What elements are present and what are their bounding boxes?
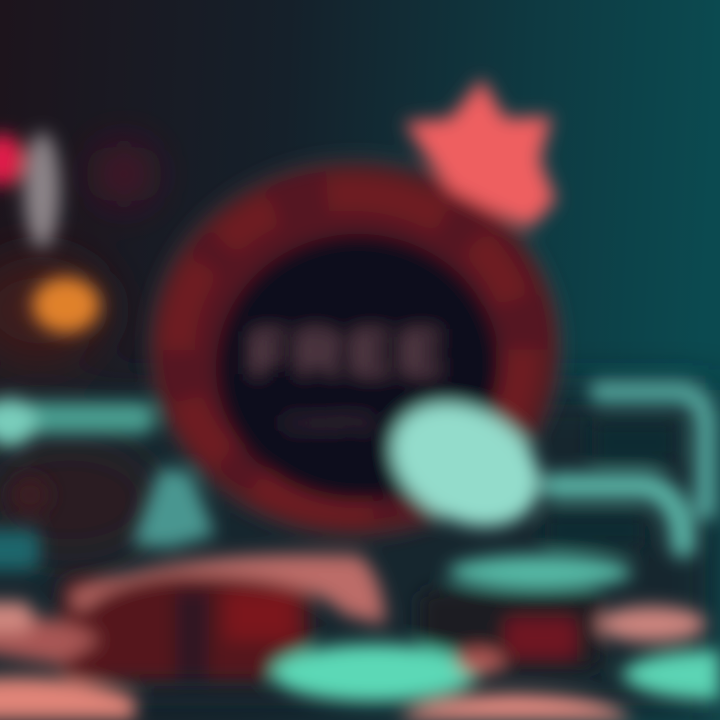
bokeh lights	[0, 132, 100, 333]
chip centre	[216, 234, 500, 502]
red centre accent	[505, 618, 577, 658]
mint chip centre	[272, 644, 478, 702]
icon: coral maple leaf	[404, 78, 556, 228]
chip pale rim	[150, 158, 560, 532]
chip ring mottling	[178, 194, 522, 506]
lower chip pile	[0, 554, 720, 720]
coral chip bottom	[400, 694, 632, 720]
right teal chip stack	[545, 392, 706, 548]
large red chip	[150, 158, 560, 537]
coral chip right	[598, 606, 706, 642]
mint chip right	[620, 650, 720, 700]
chip label: FREE	[249, 319, 451, 388]
red stack	[0, 554, 385, 680]
coral chip bottom left	[0, 677, 135, 720]
coral accent centre	[456, 649, 504, 675]
mint chip upper	[448, 555, 632, 589]
background glow and lower band	[0, 146, 720, 720]
mint tilted chip	[371, 379, 561, 551]
left teal chip stack	[0, 398, 215, 570]
chip sublabel: CHIPS	[285, 408, 375, 438]
chip outer ring	[150, 163, 560, 537]
dark middle stack	[420, 590, 600, 670]
